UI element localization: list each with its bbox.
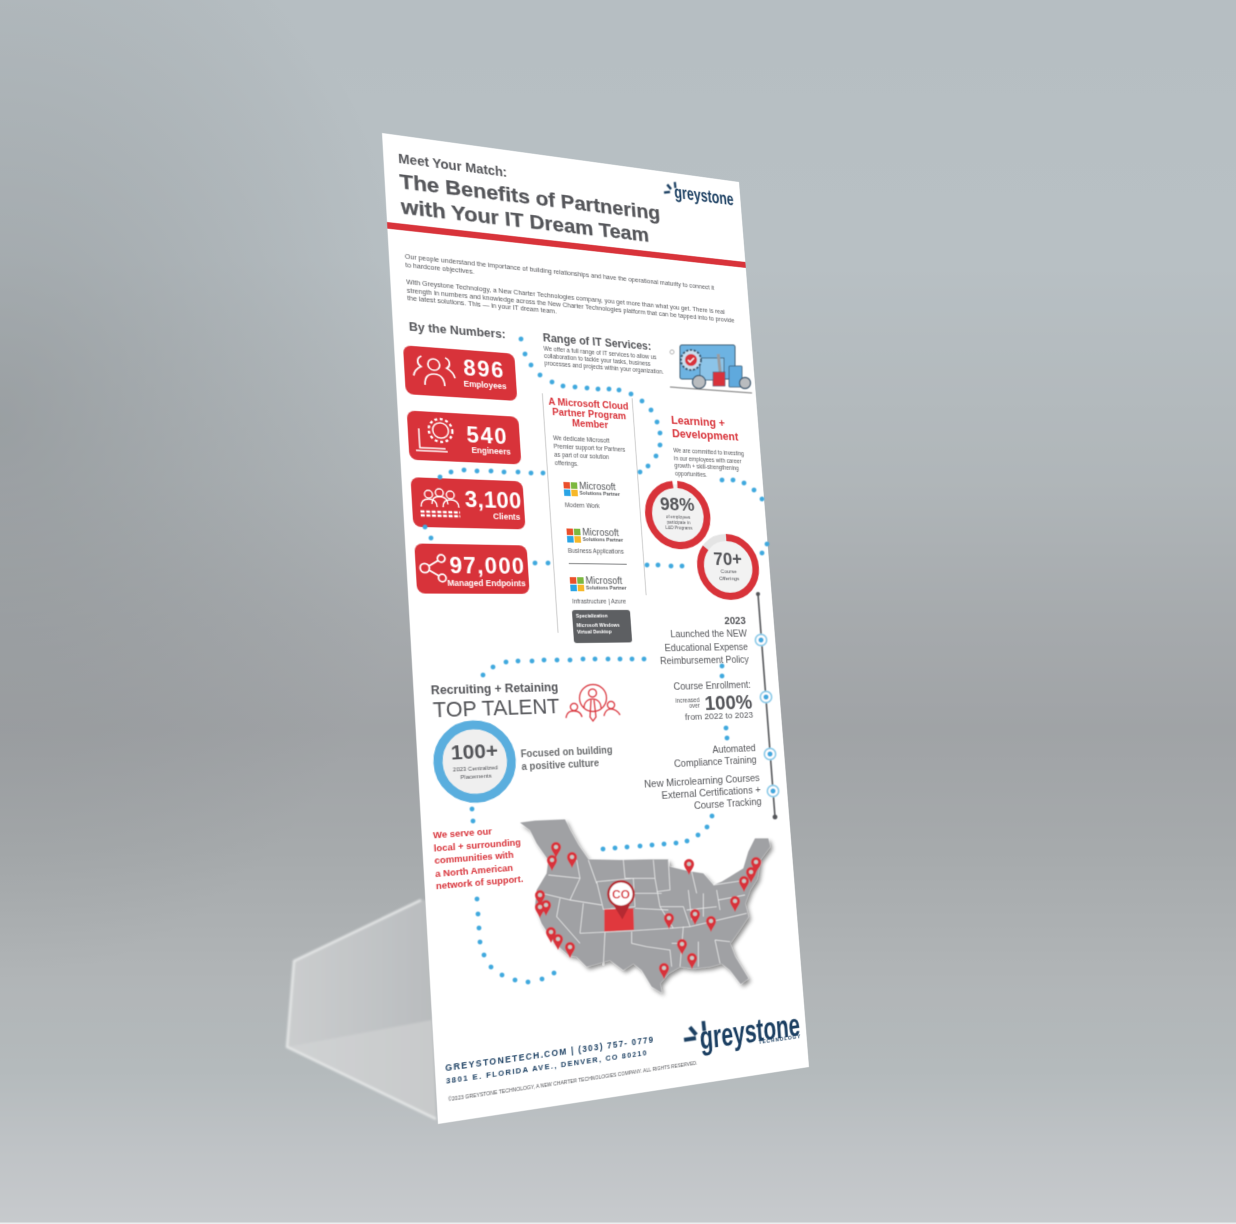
- intro text: [404, 254, 735, 324]
- learning and development heading: Learning +: [671, 414, 725, 429]
- timeline text: compliance: Automated: [712, 743, 756, 756]
- Colorado highlighted state: [604, 908, 634, 932]
- timeline text: 2023: [651, 532, 749, 667]
- donut: 70 plus courses: 70+: [713, 550, 743, 570]
- stat card: employees: [403, 345, 517, 401]
- increased over label: [434, 697, 700, 790]
- stat card: engineers: Engineers: [471, 445, 511, 457]
- timeline text: compliance: [434, 736, 757, 790]
- stat card: engineers: 540: [466, 422, 509, 449]
- range of IT services text: collaboration to tackle your tasks, business: [544, 353, 651, 368]
- microsoft partner logo 2: [566, 528, 624, 544]
- learning and development heading: [670, 414, 739, 443]
- microsoft partner logo 3: Microsoft: [585, 576, 623, 587]
- icon: top talent people: [566, 684, 620, 721]
- infrastructure azure label: Infrastructure | Azure: [572, 599, 626, 605]
- learning and development text: We are committed to investing: [673, 448, 744, 457]
- red header rule: [387, 222, 746, 268]
- map location pins: [535, 842, 761, 979]
- stat card: managed endpoints: 97,000: [449, 553, 526, 579]
- timeline text: course enrollment: Course Enrollment:: [673, 680, 751, 693]
- icon: people group: [410, 346, 456, 386]
- circle: 100 plus placements: [432, 720, 516, 804]
- donut: 98 percent: of employees: [666, 515, 691, 521]
- donut: 98 percent: L&D Programs: [665, 526, 693, 531]
- footer greystone logo: greystone: [698, 1007, 801, 1057]
- communities text: [432, 750, 524, 892]
- footer technology wordmark: TECHNOLOGY: [759, 1034, 801, 1046]
- range of IT services text: processes and projects within your organization.: [544, 361, 664, 376]
- microsoft partner logo 2: Solutions Partner: [583, 537, 623, 544]
- communities text: a North American: [435, 862, 513, 879]
- business applications label: Business Applications: [568, 548, 624, 555]
- donut: 70 plus courses: [696, 534, 760, 600]
- microsoft heading: Member: [572, 419, 608, 431]
- communities text: network of support.: [436, 873, 524, 892]
- microsoft heading: Partner Program: [552, 408, 626, 422]
- footer address text: 3801 E. FLORIDA AVE., DENVER, CO 80210: [446, 1048, 648, 1086]
- microsoft partner logo 3: Solutions Partner: [586, 586, 627, 591]
- timeline line with nodes: [755, 592, 779, 819]
- microsoft column left divider: [542, 393, 559, 633]
- learning and development text: opportunities.: [675, 471, 707, 478]
- modern work label: Modern Work: [565, 502, 600, 510]
- increased over label: increased: [675, 697, 700, 705]
- specialization box: Virtual Desktop: [577, 629, 612, 635]
- footer logo rays: [684, 1021, 706, 1042]
- positive culture text: Focused on building: [520, 746, 613, 760]
- timeline text: 100 percent: 100%: [704, 690, 753, 715]
- donut: 98 percent: participate in: [667, 521, 690, 526]
- learning and development text: [673, 448, 744, 478]
- timeline text: 2023: Launched the NEW: [670, 630, 747, 640]
- map of the United States: [520, 819, 770, 993]
- timeline text: microlearning: External Certifications +: [661, 785, 761, 802]
- top talent heading: TOP TALENT: [432, 695, 560, 722]
- icon: laptop with gear: [411, 393, 454, 453]
- from 2022 to 2023: from 2022 to 2023: [685, 710, 753, 723]
- circle: 100 plus placements: Placements: [460, 774, 492, 781]
- stat card: managed endpoints: Managed Endpoints: [447, 578, 526, 588]
- microsoft partner logo 1: [563, 482, 620, 498]
- microsoft partner logo 1: Solutions Partner: [579, 491, 620, 498]
- small logo rays: [664, 182, 677, 194]
- learning and development text: in our employees with career: [674, 455, 742, 465]
- circle: 100 plus placements: 100+: [450, 740, 499, 765]
- stat card: clients: Clients: [493, 512, 521, 522]
- stat card: clients: 3,100: [464, 487, 522, 513]
- communities text: We serve our: [433, 825, 492, 840]
- microsoft heading: [548, 397, 629, 431]
- positive culture text: a positive culture: [521, 759, 599, 773]
- communities text: local + surrounding: [433, 836, 521, 853]
- timeline text: microlearning: New Microlearning Courses: [644, 773, 760, 790]
- donut: 98 percent: [644, 480, 752, 552]
- donut: 70 plus courses: Course: [720, 569, 737, 575]
- microsoft partner logo 1: Microsoft: [579, 482, 616, 493]
- paper sheet in perspective: [382, 133, 809, 1124]
- range of IT services heading: Range of IT Services:: [542, 331, 652, 353]
- learning and development text: growth + skill-strengthening: [674, 463, 739, 472]
- microsoft body text: [552, 435, 626, 468]
- stat card: employees: Employees: [463, 379, 507, 391]
- microsoft partner logo 2: Microsoft: [582, 528, 619, 539]
- intro text: strength in numbers and knowledge across the New Charter Technologies platform that can be tapped into to provide: [407, 288, 735, 324]
- top greystone logo: greystone: [674, 182, 734, 210]
- icon: client crowd: [411, 393, 461, 518]
- intro text: With Greystone Technology, a New Charter Technologies company, you get more than what you get. There is real: [406, 280, 725, 316]
- stat card: employees: 896: [463, 355, 506, 383]
- stat card: managed endpoints: [414, 543, 530, 594]
- Colorado callout pin: CO: [612, 887, 630, 901]
- specialization box: Specialization: [576, 614, 608, 619]
- circle: 100 plus placements: 2023 Centralized: [453, 765, 498, 774]
- eyebrow heading: Meet Your Match:: [398, 152, 508, 180]
- specialization box: Microsoft Windows: [576, 623, 620, 629]
- icon: share nodes: [411, 393, 448, 584]
- main title: with Your IT Dream Team: [400, 194, 650, 246]
- range of IT services text: [543, 346, 664, 376]
- specialization box: [572, 610, 632, 643]
- icon: IT services illustration: [670, 345, 752, 393]
- timeline text: 2023: Educational Expense: [664, 642, 748, 654]
- intro text: the latest solutions. This — in your IT dream team.: [407, 296, 557, 316]
- recruiting heading: Recruiting + Retaining: [430, 681, 559, 697]
- intro text: Our people understand the importance of building relationships and have the operational maturity to connect it: [405, 254, 714, 292]
- communities text: communities with: [434, 849, 514, 866]
- positive culture text: [520, 746, 613, 773]
- increased over label: over: [689, 703, 700, 710]
- main title: The Benefits of Partnering: [399, 169, 661, 224]
- timeline text: 2023: 2023: [724, 615, 746, 627]
- timeline text: 2023: Reimbursement Policy: [660, 655, 749, 667]
- microsoft partner logo 3: [570, 576, 627, 592]
- donut: 70 plus courses: Offerings: [719, 576, 740, 582]
- by the numbers heading: By the Numbers:: [408, 320, 506, 341]
- timeline text: microlearning: [434, 736, 762, 812]
- microsoft body text: as part of our solution: [554, 452, 609, 461]
- microsoft body text: offerings.: [555, 460, 579, 468]
- microsoft column right divider: [632, 398, 647, 595]
- microsoft body text: We dedicate Microsoft: [553, 435, 610, 445]
- microsoft body text: Premier support for Partners: [553, 444, 625, 454]
- intro text: to hardcore objectives.: [405, 262, 475, 275]
- footer contact text: GREYSTONETECH.COM | (303) 757- 0779: [445, 1034, 655, 1073]
- timeline text: compliance: Compliance Training: [674, 755, 757, 770]
- timeline text: microlearning: Course Tracking: [694, 796, 762, 812]
- stat card: clients: [411, 477, 526, 529]
- range of IT services text: We offer a full range of IT services to allow us: [543, 346, 657, 361]
- blue dotted connector path: [423, 337, 769, 984]
- copyright text: ©2023 GREYSTONE TECHNOLOGY, A NEW CHARTER TECHNOLOGIES COMPANY. ALL RIGHTS RESERVED.: [448, 1061, 698, 1103]
- donut: 98 percent: 98%: [659, 495, 695, 515]
- microsoft heading: A Microsoft Cloud: [548, 397, 629, 412]
- Colorado callout pin: [608, 881, 634, 919]
- learning and development heading: Development: [672, 427, 739, 443]
- stat card: engineers: [407, 410, 521, 464]
